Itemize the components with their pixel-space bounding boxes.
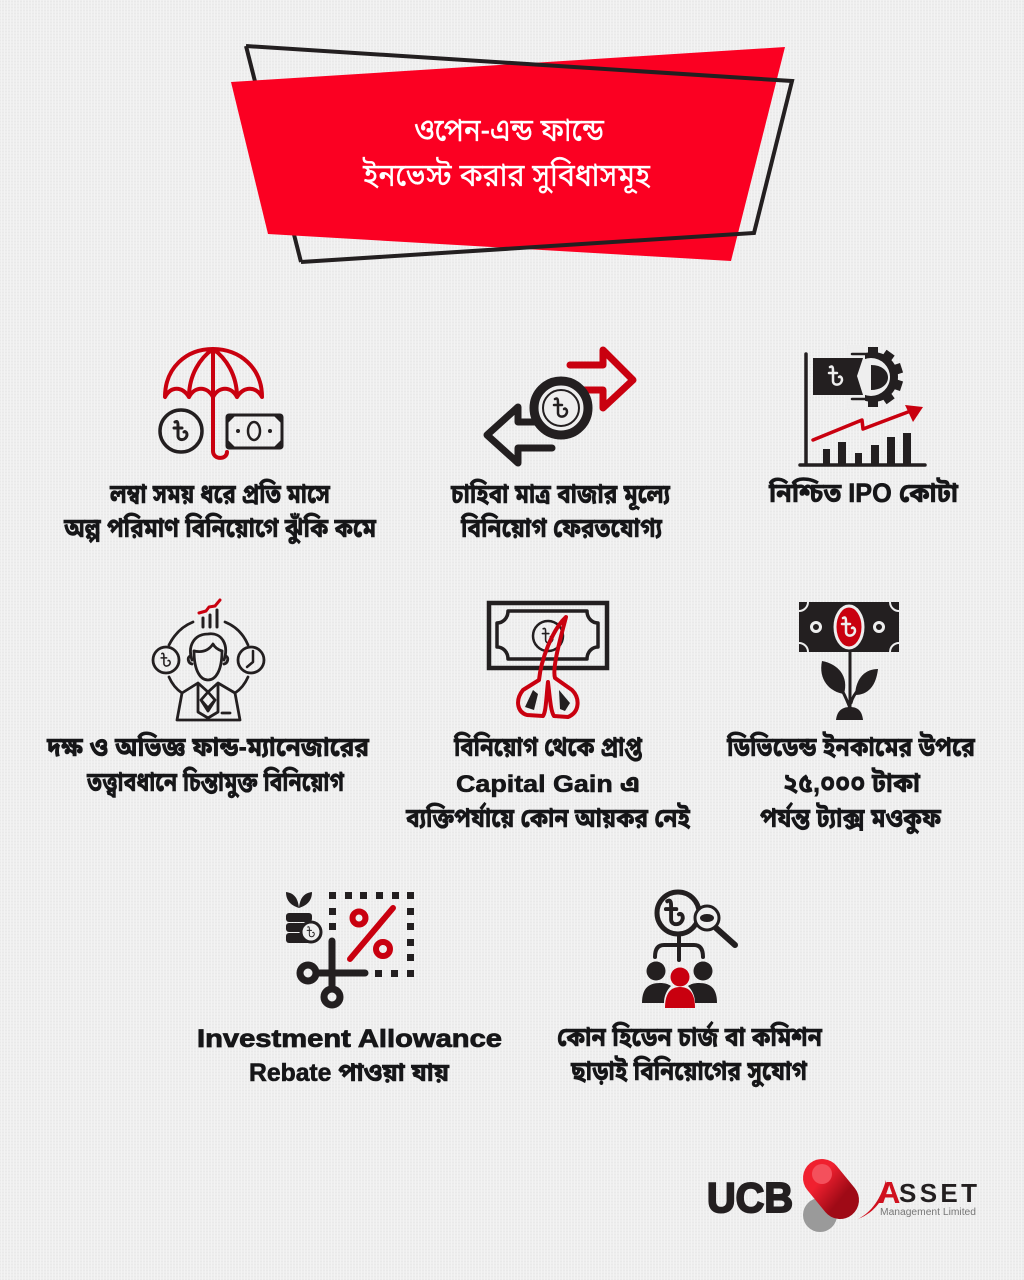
caption 2: বিনিয়োগ ফেরতযোগ্য (460, 512, 662, 543)
caption 2: চাহিবা মাত্র বাজার মূল্যে (450, 478, 670, 511)
caption 7: Investment Allowance (197, 1025, 502, 1053)
title banner (231, 46, 792, 262)
caption 5 (405, 731, 691, 833)
caption 2 (450, 478, 670, 543)
caption 8: কোন হিডেন চার্জ বা কমিশন (557, 1021, 823, 1052)
icon: magnifier over coin and people (642, 892, 735, 1008)
caption 4: তত্ত্বাবধানে চিন্তামুক্ত বিনিয়োগ (86, 766, 344, 799)
caption 8: ছাড়াই বিনিয়োগের সুযোগ (570, 1055, 807, 1088)
caption 1 (63, 478, 377, 545)
caption 6: ২৫,০০০ টাকা (783, 767, 920, 798)
benefit 3: guaranteed IPO quota (768, 345, 958, 508)
icon: scissors cutting a banknote (489, 603, 607, 717)
caption 5: Capital Gain এ (456, 771, 640, 798)
wordmark ASSET: SSET (899, 1178, 977, 1208)
benefit 2: redeemable on demand (450, 350, 670, 543)
icon: coin with two arrows (487, 350, 633, 463)
benefit 8: no hidden charges (557, 892, 823, 1088)
benefit 4: skilled fund manager (46, 600, 370, 799)
caption 6 (726, 731, 976, 835)
benefit 5: no income tax on capital gain (405, 603, 691, 833)
caption 1: অল্প পরিমাণ বিনিয়োগে ঝুঁকি কমে (63, 512, 377, 545)
caption 4 (46, 731, 370, 799)
caption 6: পর্যন্ত ট্যাক্স মওকুফ (760, 802, 942, 835)
caption 1: লম্বা সময় ধরে প্রতি মাসে (109, 478, 330, 509)
caption 5: বিনিয়োগ থেকে প্রাপ্ত (453, 731, 643, 763)
swoosh (858, 1180, 886, 1219)
title text: ইনভেস্ট করার সুবিধাসমূহ (362, 157, 651, 194)
caption 5: ব্যক্তিপর্যায়ে কোন আয়কর নেই (405, 802, 691, 833)
icon: banknote plant (799, 602, 899, 720)
benefit 7: investment allowance rebate (197, 892, 502, 1087)
wordmark ASSET (878, 1175, 977, 1210)
benefit 6: dividend income tax waiver (726, 602, 976, 835)
tagline: Management Limited (880, 1207, 976, 1218)
icon: percent coupon with scissors (286, 892, 414, 1005)
caption 6: ডিভিডেন্ড ইনকামের উপরে (726, 731, 976, 762)
icon: umbrella with coin and banknote (160, 349, 282, 458)
UCB Asset Management logo (707, 1164, 977, 1232)
benefit 1: long-term small investment (63, 349, 377, 545)
wordmark ASSET: A (878, 1175, 900, 1210)
caption 8 (557, 1021, 823, 1088)
caption 3: নিশ্চিত IPO কোটা (768, 477, 958, 508)
title text (362, 112, 651, 194)
wordmark UCB: UCB (707, 1174, 793, 1221)
caption 4: দক্ষ ও অভিজ্ঞ ফান্ড-ম্যানেজারের (46, 731, 370, 762)
icon: manager with coin, clock and chart (153, 600, 264, 720)
icon: flag, gear and rising chart (800, 345, 925, 465)
caption 7 (197, 1025, 502, 1087)
logo emblem pill (803, 1164, 840, 1232)
caption 7: Rebate পাওয়া যায় (249, 1059, 450, 1087)
title text: ওপেন-এন্ড ফান্ডে (414, 112, 605, 148)
